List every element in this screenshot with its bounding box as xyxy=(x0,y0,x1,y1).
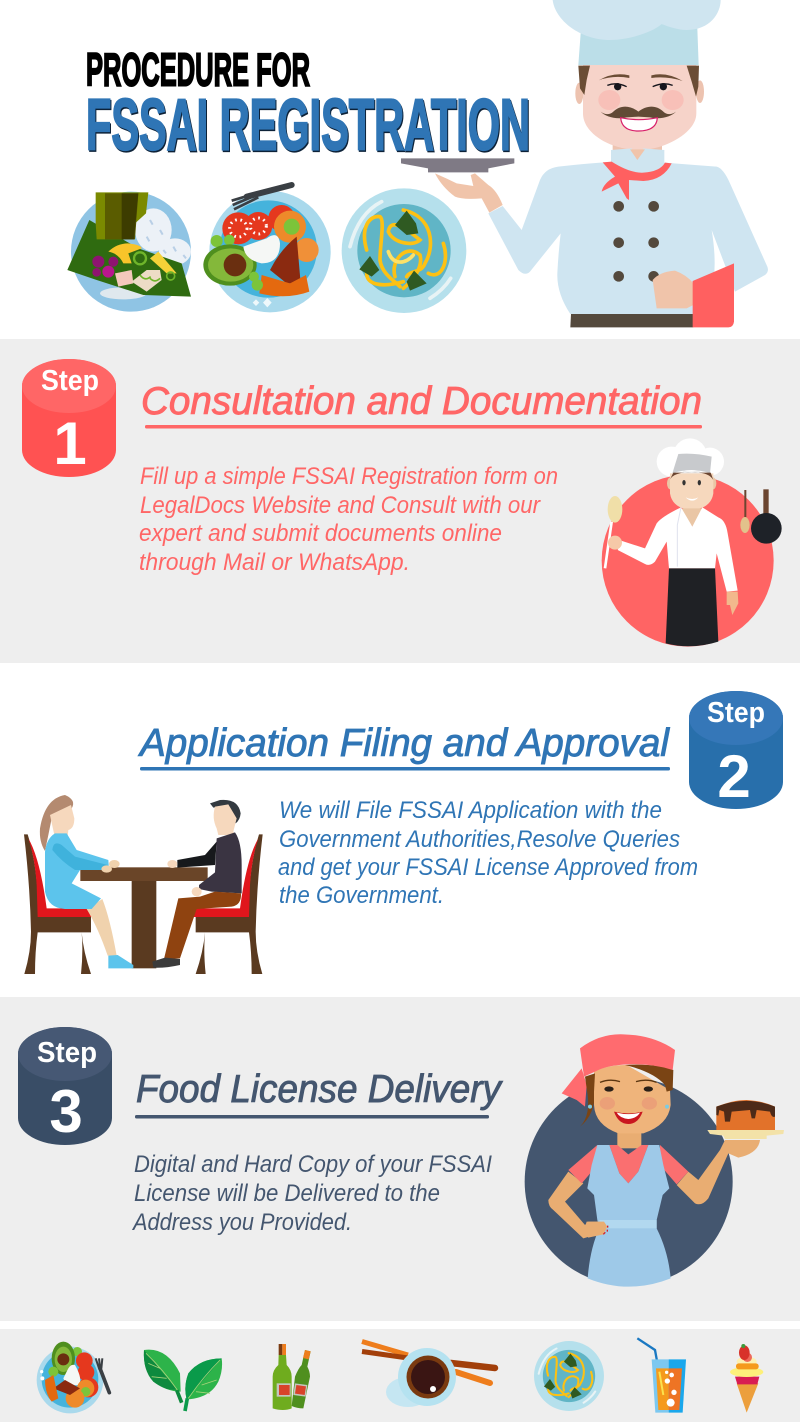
icon: ice cream cone xyxy=(730,1344,763,1413)
panel: step 3 xyxy=(0,997,800,1321)
illustration: chef with spoon and pan xyxy=(602,438,782,647)
panel: header xyxy=(67,0,768,327)
step 3 text xyxy=(131,1151,492,1236)
step 2 badge xyxy=(689,691,783,810)
icon: noodle plate xyxy=(342,188,466,313)
illustration: two people at table xyxy=(24,795,263,974)
man xyxy=(152,800,242,968)
icon: orange drink with straw xyxy=(637,1338,686,1413)
icon: two bottles xyxy=(273,1344,311,1410)
icon: avocado plate with fork xyxy=(203,185,331,312)
step 2 text: and get your FSSAI License Approved from xyxy=(278,854,698,881)
heading: consultation and documentation: Consultation and Documentation xyxy=(141,380,702,423)
step 2 badge: Step xyxy=(707,697,765,729)
step 1 badge: Step xyxy=(41,365,99,397)
chef body xyxy=(488,148,768,327)
step 1 text: Fill up a simple FSSAI Registration form on xyxy=(140,463,558,490)
table xyxy=(80,867,208,968)
icon: green leaves xyxy=(144,1350,222,1411)
chef illustration xyxy=(401,0,768,327)
step 3 badge: 3 xyxy=(49,1078,83,1145)
step 2 text: We will File FSSAI Application with the xyxy=(279,797,662,824)
panel: step 1 xyxy=(0,339,800,663)
heading: application filing and approval: Application Filing and Approval xyxy=(138,722,670,765)
step 2 text xyxy=(278,797,698,909)
step 2 text: the Government. xyxy=(279,882,444,909)
heading: food license delivery: Food License Delivery xyxy=(136,1068,503,1111)
step 3 text: Digital and Hard Copy of your FSSAI xyxy=(134,1151,492,1178)
step 2 text: Government Authorities,Resolve Queries xyxy=(279,826,680,853)
step 3 badge xyxy=(18,1027,112,1145)
step 3 badge: Step xyxy=(37,1037,97,1069)
step 1 text: through Mail or WhatsApp. xyxy=(139,549,410,576)
step 1 text xyxy=(139,463,558,576)
right chair xyxy=(192,834,263,974)
step 1 text: LegalDocs Website and Consult with our xyxy=(140,492,541,519)
chef hat xyxy=(553,0,721,65)
woman xyxy=(40,795,133,968)
chef folder and hand xyxy=(653,263,734,327)
step 3 text: Address you Provided. xyxy=(131,1209,352,1236)
panel: step 2 xyxy=(24,691,783,974)
step 1 badge: 1 xyxy=(53,410,87,477)
left chair xyxy=(24,834,95,974)
step 3 text: License will be Delivered to the xyxy=(134,1180,440,1207)
chef hand with plate xyxy=(401,158,514,213)
title xyxy=(86,44,531,167)
icon: banana leaf rice plate xyxy=(67,192,191,312)
icon: noodle plate small xyxy=(534,1341,604,1411)
step 1 text: expert and submit documents online xyxy=(139,520,502,547)
chef head xyxy=(575,65,704,151)
panel: footer icons xyxy=(0,1329,800,1422)
title: PROCEDURE FOR xyxy=(86,44,310,96)
illustration: woman with cake xyxy=(525,1034,784,1287)
icon: salad plate with fork xyxy=(37,1342,109,1413)
icon: soy sauce bowl with chopsticks xyxy=(362,1342,495,1407)
step 1 badge xyxy=(22,359,116,477)
step 2 badge: 2 xyxy=(717,743,751,810)
